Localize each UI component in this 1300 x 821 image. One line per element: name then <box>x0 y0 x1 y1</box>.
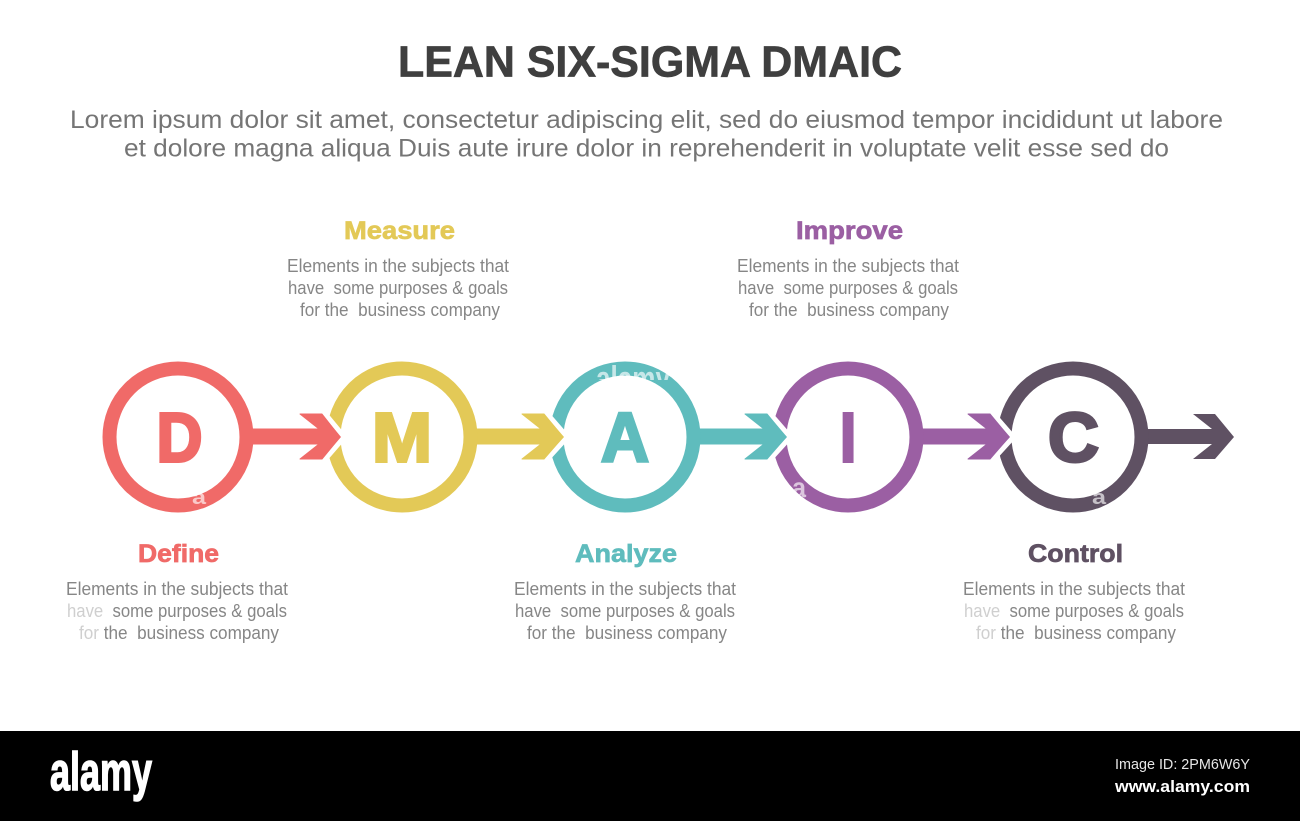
circle: Define <box>110 368 246 506</box>
step: Measure text: Elements in the subjects that <box>287 256 509 276</box>
step: Define text: Define <box>138 540 219 568</box>
step: Control text: Control <box>1028 540 1123 568</box>
step: Improve text: Improve <box>796 217 903 245</box>
subtitle text <box>70 106 1223 162</box>
arrow: Analyze to Improve <box>692 414 787 459</box>
step: Measure text: for the business company <box>300 300 500 320</box>
step: Measure text <box>287 217 509 320</box>
step: Measure text: Measure <box>344 217 455 245</box>
step: Control text: have some purposes & goals <box>964 601 1184 621</box>
subtitle text: et dolore magna aliqua Duis aute irure dolor in reprehenderit in voluptate velit esse sed do <box>124 134 1169 162</box>
arrow: Improve to Control <box>915 414 1010 459</box>
step: Analyze text <box>514 540 736 643</box>
arrow: Define to Measure <box>246 414 341 459</box>
circle: Improve: I <box>840 398 856 476</box>
step: Control text: Elements in the subjects that <box>963 579 1185 599</box>
step: Analyze text: Analyze <box>575 540 677 568</box>
watermark remnants: a <box>1092 487 1107 509</box>
image id: Image ID: 2PM6W6Y <box>1115 756 1250 773</box>
circle: Analyze <box>556 368 694 506</box>
circle: Analyze: A <box>601 398 649 476</box>
subtitle text: Lorem ipsum dolor sit amet, consectetur adipiscing elit, sed do eiusmod tempor incididunt ut labore <box>70 106 1223 134</box>
footer bar <box>0 731 1300 821</box>
circle: Define: D <box>156 398 202 476</box>
circle: Improve <box>780 368 916 506</box>
step: Measure text: have some purposes & goals <box>288 278 508 298</box>
step: Improve text: Elements in the subjects that <box>737 256 959 276</box>
watermark remnants: a <box>792 472 806 503</box>
step: Define text: have some purposes & goals <box>67 601 287 621</box>
step: Improve text: for the business company <box>749 300 949 320</box>
title: LEAN SIX-SIGMA DMAIC <box>398 38 902 86</box>
step: Control text: for the business company <box>976 623 1176 643</box>
step: Control text <box>963 540 1185 643</box>
footer logo: alamy <box>50 742 152 802</box>
step: Define text <box>66 540 288 643</box>
circle: Control <box>1004 368 1142 506</box>
footer url: www.alamy.com <box>1114 777 1250 796</box>
step: Define text: for the business company <box>79 623 279 643</box>
watermark remnants: alamy <box>596 360 670 398</box>
circle: Measure: M <box>372 398 432 476</box>
arrow: Control outgoing <box>1140 414 1234 459</box>
step: Analyze text: Elements in the subjects that <box>514 579 736 599</box>
step: Analyze text: have some purposes & goals <box>515 601 735 621</box>
step: Improve text: have some purposes & goals <box>738 278 958 298</box>
step: Analyze text: for the business company <box>527 623 727 643</box>
circle: Measure <box>334 368 470 506</box>
step: Improve text <box>737 217 959 320</box>
step: Define text: Elements in the subjects that <box>66 579 288 599</box>
watermark remnants: a <box>192 487 207 509</box>
circle: Control: C <box>1048 398 1099 476</box>
watermark remnants <box>192 360 1107 509</box>
arrow: Measure to Analyze <box>470 414 564 459</box>
